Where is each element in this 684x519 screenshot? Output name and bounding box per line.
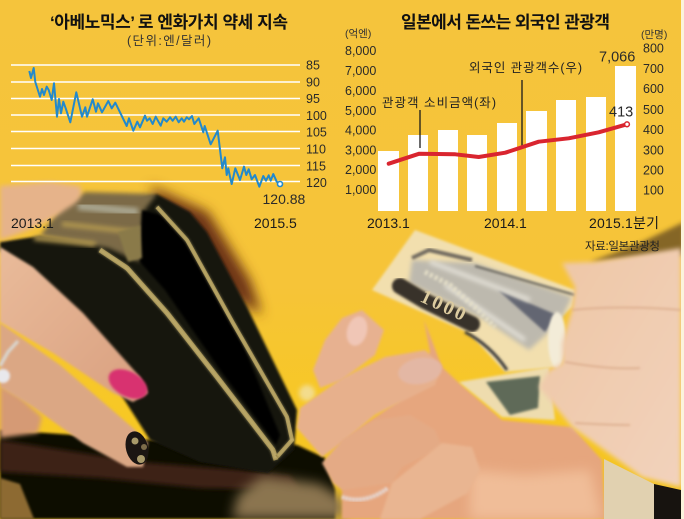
leopard strap corner [0,478,34,519]
x label 2013.1: 2013.1 [367,215,410,231]
rear zipper [157,207,292,457]
lower dark background [0,430,335,519]
finger creases [565,308,681,425]
palm highlight [470,470,602,519]
note blue-grey wave [498,290,557,332]
right axis labels: 100 [643,184,664,198]
note value: 1000 [417,286,471,327]
wallet top metal parts [34,224,135,244]
panel: foreign tourists chart [345,13,667,253]
note pale strokes [430,262,530,340]
right hand [539,248,681,487]
wallet halo [150,186,262,315]
bag clasp blur at lower right [232,476,345,519]
second finger nail [396,354,444,388]
label: spending: 관광객 소비금액(좌) [382,96,496,110]
left axis labels: 6,000 [345,84,376,98]
note flowers [425,272,495,327]
right axis labels: 300 [643,144,664,158]
third finger [0,385,42,438]
middle finger [0,323,148,467]
first finger nail [343,314,371,348]
pale background glint [299,385,315,401]
y axis labels: 120 [306,176,327,190]
shadow behind right hand [590,222,684,262]
striped shirt cuff [604,459,654,519]
left hand fourth finger [380,443,480,519]
latest value marker [278,182,282,186]
y axis labels [306,58,327,190]
wallet body [0,194,297,473]
top finger [0,182,82,240]
end date: 2015.5 [254,215,297,231]
index finger [0,247,148,402]
left axis labels: 2,000 [345,163,376,177]
right axis labels: 500 [643,103,664,117]
right axis labels: 700 [643,62,664,76]
exchange rate line [29,68,280,187]
front zipper [100,250,276,460]
panel: yen exchange rate chart [11,13,327,231]
start date: 2013.1 [11,215,54,231]
left hand first finger [313,310,384,388]
y axis labels: 95 [306,92,320,106]
zipper pull [118,225,142,262]
title: 일본에서 돈쓰는 외국인 관광객 [401,13,610,32]
black sleeve [654,484,681,519]
left axis labels: 8,000 [345,44,376,58]
value 413: 413 [609,104,633,120]
gridlines [11,65,300,182]
final point marker [625,122,629,127]
upper banknote [372,230,575,372]
note top ornament [412,250,472,260]
left axis labels: 1,000 [345,183,376,197]
right axis labels: 200 [643,164,664,178]
leader line: tourists [521,80,523,147]
y axis labels: 110 [306,142,326,156]
latest value: 120.88 [262,191,306,207]
left axis labels: 3,000 [345,144,376,158]
unit subtitle: (단위:엔/달러) [127,34,211,48]
right axis labels: 600 [643,82,664,96]
right edge strip [681,0,684,519]
value 7,066: 7,066 [599,50,635,66]
diamond ring [342,488,388,500]
left axis labels: 7,000 [345,64,376,78]
x label 2015.1 quarter: 2015.1분기 [589,215,659,231]
title: ‘아베노믹스’ 로 엔화가치 약세 지속 [50,13,288,32]
lower banknote [459,367,555,420]
tourist count line [389,124,627,164]
source: 자료:일본관광청 [585,239,660,253]
y axis labels: 105 [306,126,327,140]
y axis labels: 115 [306,160,326,174]
note lower curve [465,332,507,370]
left axis labels [345,44,376,197]
pearl [0,369,10,383]
photo: hands counting yen notes [297,222,684,519]
y axis labels: 90 [306,76,320,90]
y axis labels: 85 [306,58,320,72]
wallet opening [140,210,280,445]
note dark flower band [400,286,472,324]
bars [378,66,636,211]
right axis unit: (만명) [641,29,667,41]
decorated black nail [122,429,152,467]
right axis labels: 800 [643,42,664,56]
wallet top tan blur [40,192,157,262]
note engraving wash [409,260,572,350]
ring [0,341,18,366]
label: tourist count: 외국인 관광객수(우) [469,61,582,75]
left axis labels: 4,000 [345,124,376,138]
y axis labels: 100 [306,109,327,123]
left axis labels: 5,000 [345,104,376,118]
brown strap [0,440,300,490]
watermark area [548,312,566,368]
leader line: spending [419,110,421,148]
left axis unit: (억엔) [345,28,371,40]
right axis labels [643,42,664,198]
note upper stroke [475,266,575,295]
right axis labels: 400 [643,123,664,137]
left hand second finger [297,350,442,457]
pink nail [104,363,152,405]
photo: hand holding open wallet [0,182,345,519]
palm [342,320,605,519]
x label 2014.1: 2014.1 [484,215,527,231]
left hand third finger [322,415,442,490]
